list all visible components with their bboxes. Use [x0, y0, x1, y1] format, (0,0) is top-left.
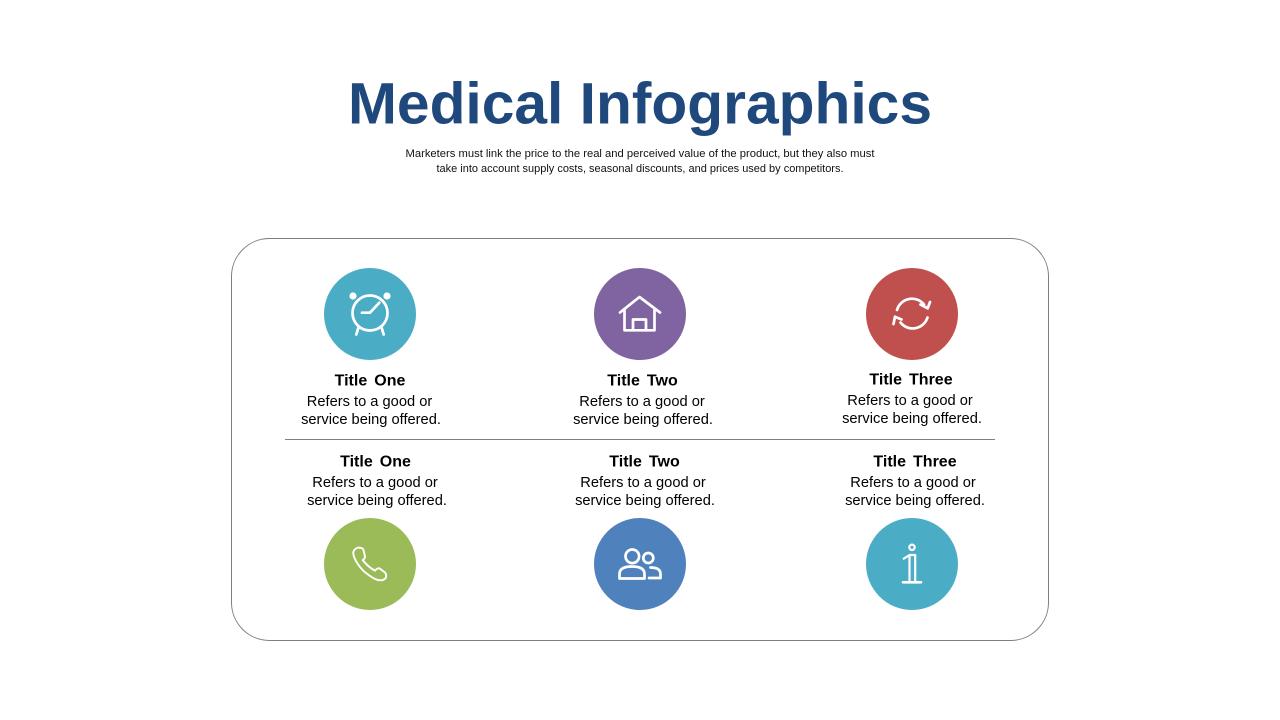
text: title three bottom: Refers to a good or [850, 475, 976, 491]
item: top centre, house [573, 268, 713, 428]
icon: two people [620, 550, 660, 578]
text: title one top: service being offered. [301, 412, 441, 428]
text: title one top [301, 372, 441, 428]
subtitle text: take into account supply costs, seasonal discounts, and prices used by competitors. [436, 163, 844, 175]
text: title two top: service being offered. [573, 412, 713, 428]
text: title three bottom: service being offered. [845, 493, 985, 509]
text: title two bottom: Refers to a good or [580, 475, 706, 491]
text: title two bottom: Title Two [609, 454, 680, 470]
subtitle text [406, 148, 874, 175]
panel: rounded container [232, 238, 1048, 640]
icon: refresh arrows [894, 299, 930, 328]
item: bottom right, info [845, 454, 985, 610]
icon: phone handset [353, 548, 386, 580]
subtitle text: Marketers must link the price to the real and perceived value of the product, but they also must [406, 148, 874, 160]
item: top left, alarm clock [301, 268, 441, 428]
text: title three bottom [845, 454, 985, 509]
text: title two bottom [575, 454, 715, 509]
text: title two top: Refers to a good or [579, 394, 705, 410]
text: title two top: Title Two [607, 372, 678, 390]
icon: info person [903, 545, 921, 582]
text: title one top: Title One [335, 372, 405, 390]
icon: alarm clock [349, 292, 391, 334]
text: title three top: service being offered. [842, 411, 982, 427]
text: title three top [842, 372, 982, 427]
icon: house [620, 297, 660, 330]
text: title one bottom: Refers to a good or [312, 475, 438, 491]
text: title one top: Refers to a good or [307, 394, 432, 410]
item: bottom left, phone [307, 454, 447, 610]
text: title one bottom [307, 454, 447, 509]
title: Medical Infographics [348, 72, 932, 136]
text: title one bottom: Title One [340, 454, 411, 470]
text: title three top: Title Three [869, 372, 953, 388]
text: title two top [573, 372, 713, 428]
text: title one bottom: service being offered. [307, 493, 447, 509]
item: bottom centre, people [575, 454, 715, 610]
item: top right, refresh [842, 268, 982, 427]
text: title three bottom: Title Three [873, 454, 957, 470]
text: title two bottom: service being offered. [575, 493, 715, 509]
text: title three top: Refers to a good or [847, 393, 973, 409]
